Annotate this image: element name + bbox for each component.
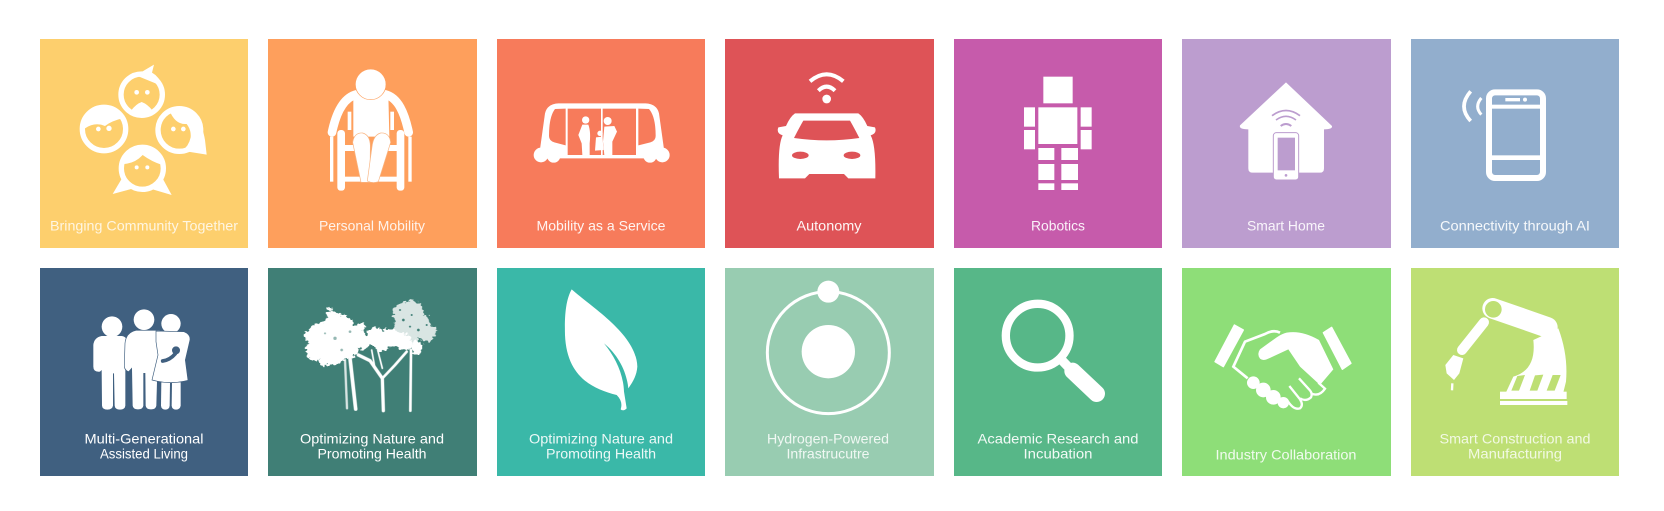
panel: Optimizing Nature and Promoting Health (leaf)	[497, 268, 705, 476]
icon: hydrogen atom	[767, 281, 889, 414]
icon: trees	[305, 300, 437, 411]
label: Multi-Generational	[84, 430, 204, 446]
panel: Multi-Generational Assisted Living	[40, 268, 248, 476]
label: Assisted Living	[100, 446, 188, 462]
icon: leaf	[565, 289, 637, 410]
label: Smart Construction and	[1440, 430, 1590, 446]
label: Connectivity through AI	[1440, 218, 1590, 234]
panel: Academic Research and Incubation	[954, 268, 1162, 476]
label: Incubation	[1024, 446, 1092, 462]
icon: connected car	[778, 74, 876, 178]
label: Robotics	[1031, 218, 1085, 234]
panel: Mobility as a Service	[497, 39, 705, 248]
panel: Hydrogen-Powered Infrastructure	[725, 268, 934, 476]
label: Promoting Health	[546, 446, 656, 462]
label: Academic Research and	[978, 430, 1138, 446]
label: Smart Home	[1247, 218, 1325, 234]
icon: robotic arm	[1445, 301, 1567, 405]
panel: Industry Collaboration	[1182, 268, 1391, 476]
label: Bringing Community Together	[50, 218, 238, 234]
label: Hydrogen-Powered	[767, 430, 889, 446]
icon: four faces	[82, 65, 207, 195]
icon: wheelchair user	[330, 69, 412, 191]
panel: Optimizing Nature and Promoting Health (trees)	[268, 268, 477, 476]
panel: Bringing Community Together	[40, 39, 248, 248]
label: Personal Mobility	[319, 218, 425, 234]
label	[300, 430, 444, 462]
label: Mobility as a Service	[536, 218, 666, 234]
panel: Personal Mobility	[268, 39, 477, 248]
label: Optimizing Nature and	[300, 430, 444, 446]
label	[978, 430, 1138, 462]
panel: Smart Construction and Manufacturing	[1411, 268, 1619, 476]
icon: autonomous shuttle	[534, 103, 670, 163]
label: Autonomy	[796, 218, 862, 234]
label	[1440, 430, 1590, 462]
icon: handshake	[1215, 325, 1351, 409]
label: Optimizing Nature and	[529, 430, 673, 446]
label: Infrastrucutre	[786, 446, 870, 462]
panel: Robotics	[954, 39, 1162, 248]
panel: Autonomy	[725, 39, 934, 248]
label: Promoting Health	[318, 446, 426, 462]
icon: family with baby	[93, 309, 190, 410]
icon: smart home with phone	[1240, 82, 1332, 180]
label: Manufacturing	[1468, 446, 1562, 462]
panel: Connectivity through AI	[1411, 39, 1619, 248]
icon: magnifying glass	[1006, 304, 1097, 394]
label: Industry Collaboration	[1216, 446, 1356, 462]
icon: smartphone signal	[1464, 91, 1543, 178]
panel: Smart Home	[1182, 39, 1391, 248]
label	[529, 430, 673, 462]
icon: block robot	[1024, 77, 1092, 190]
label	[84, 430, 204, 462]
label	[767, 430, 889, 462]
